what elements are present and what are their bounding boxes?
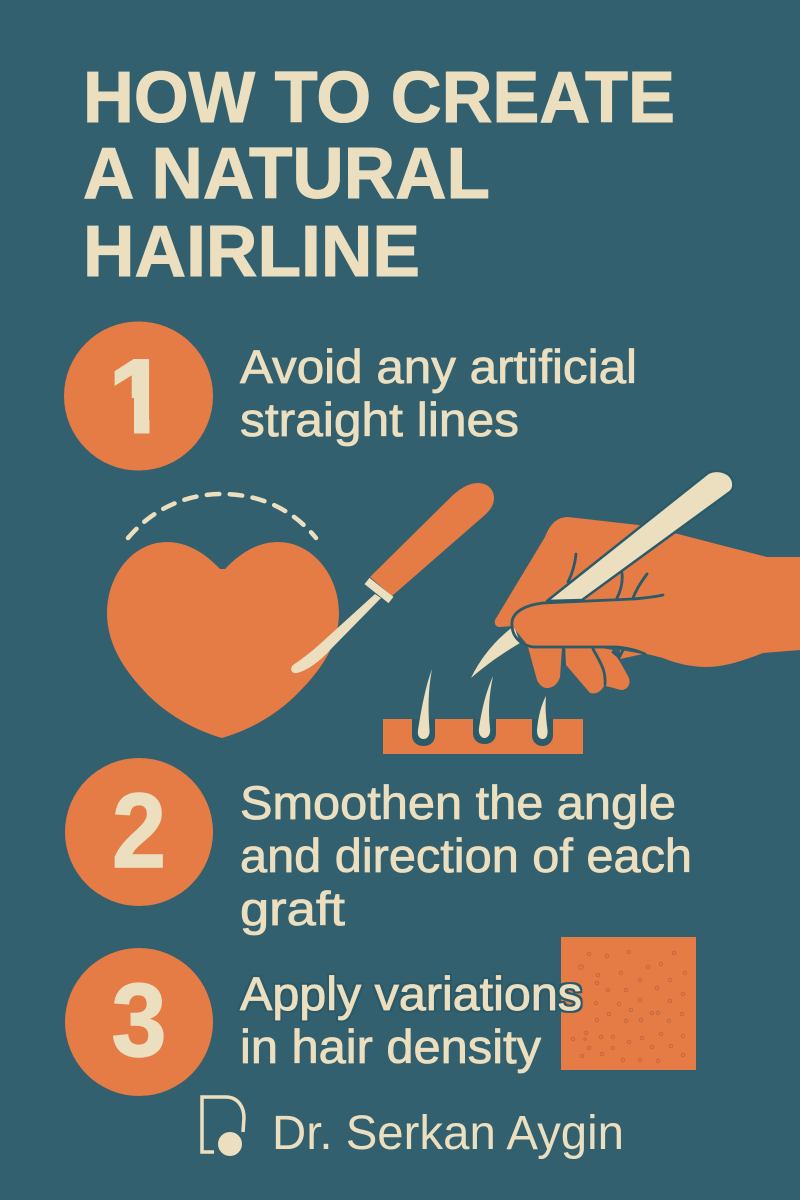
follicle 2 xyxy=(473,676,496,744)
step 1 number badge: 1 xyxy=(109,339,167,455)
step 2 text: and direction of each xyxy=(240,829,692,882)
icon: skin cross-section with hair follicles xyxy=(383,669,583,754)
footer name: Dr. Serkan Aygin xyxy=(272,1107,624,1160)
step 3 text: in hair density xyxy=(240,1020,542,1073)
step 1 number badge xyxy=(64,322,213,470)
title xyxy=(83,58,675,292)
step 1 text: Avoid any artificial xyxy=(240,340,637,393)
icon: hair density swatch xyxy=(561,937,696,1070)
follicle 1 xyxy=(412,669,435,746)
step 2 number badge: 2 xyxy=(112,772,166,890)
step 2 text xyxy=(240,776,692,935)
title: A NATURAL xyxy=(83,134,490,214)
step 1 text: straight lines xyxy=(240,393,519,446)
step 3 number badge: 3 xyxy=(112,963,166,1079)
icon: heart-shaped hairline xyxy=(107,542,339,738)
finger lines xyxy=(512,554,663,684)
icon: hand holding surgical tool xyxy=(471,471,800,693)
title: HOW TO CREATE xyxy=(83,58,675,138)
icon: scalpel on heart xyxy=(291,483,494,673)
step 3 text: Apply variations xyxy=(240,967,582,1020)
icon: dashed ideal hairline arc xyxy=(128,494,316,538)
step 3 text xyxy=(240,967,582,1073)
footer logo mark xyxy=(202,1097,244,1156)
follicle 3 xyxy=(532,696,553,746)
blade xyxy=(471,626,520,678)
step 2 text: Smoothen the angle xyxy=(240,776,676,829)
step 3 number badge xyxy=(65,948,213,1096)
title: HAIRLINE xyxy=(83,212,420,292)
step 2 text: graft xyxy=(240,882,345,935)
surgical tool handle xyxy=(547,471,733,601)
step 2 number badge xyxy=(65,758,213,906)
lower fingers xyxy=(528,647,562,688)
step 1 text xyxy=(240,340,637,446)
hand back and palm xyxy=(495,517,800,667)
